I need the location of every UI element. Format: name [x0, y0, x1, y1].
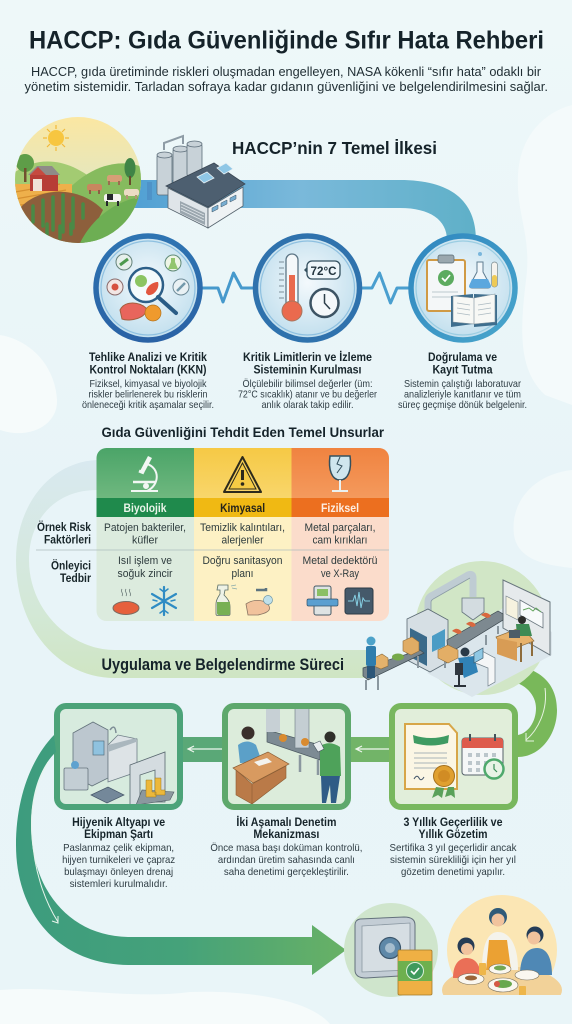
text: three year validity: 3 Yıllık Geçerlilik ve — [404, 817, 502, 829]
connector: card 2 to card 1 — [183, 737, 222, 762]
text: verification: Kayıt Tutma — [432, 364, 493, 376]
text: hazard analysis: Kontrol Noktaları (KKN) — [90, 364, 207, 376]
icon: safe with packaged food — [344, 903, 438, 997]
worker with helmet — [366, 636, 376, 678]
connector: heartbeat 1 — [200, 273, 256, 302]
icon: cows — [87, 175, 139, 206]
icon: warning triangle — [224, 457, 261, 492]
icon: x-ray monitor — [345, 588, 373, 614]
table cells: Metal parçaları, — [304, 522, 376, 534]
icon: spray bottle — [216, 585, 237, 616]
row labels: Faktörleri — [44, 534, 91, 546]
text: critical limits: anlık olarak takip edilir. — [262, 399, 354, 411]
text: two-stage audit: İki Aşamalı Denetim — [236, 816, 336, 829]
text: hygiene infrastructure: hijyen turnikeleri ve çapraz — [62, 854, 175, 866]
table cells: alerjenler — [222, 534, 264, 546]
icon: clipboard, flask and book — [411, 236, 515, 340]
icon: barn — [28, 166, 60, 191]
text: hazard analysis: riskler belirlenerek bu risklerin — [88, 388, 208, 400]
text: hygiene infrastructure: Paslanmaz çelik ekipman, — [63, 842, 174, 854]
table cells: Metal dedektörü — [302, 555, 378, 567]
column headers: Fiziksel — [321, 503, 359, 515]
heading: implementation process: Uygulama ve Belgelendirme Süreci — [102, 655, 344, 674]
icon: thermometer and clock: 72°C — [310, 264, 337, 278]
blue process band — [125, 180, 476, 240]
seated auditor — [238, 726, 262, 763]
icon: microscope — [131, 457, 158, 491]
icon: farm landscape — [14, 117, 145, 245]
text: two-stage audit: saha denetimi gerçekleştirilir. — [224, 866, 349, 878]
text: hygiene infrastructure: Hijyenik Altyapı ve — [72, 817, 165, 829]
heading: seven principles: HACCP’nin 7 Temel İlkesi — [232, 138, 437, 158]
table cells: Doğru sanitasyon — [202, 555, 282, 567]
table cells: Temizlik kalıntıları, — [200, 522, 285, 534]
table cells — [104, 522, 378, 580]
text: critical limits: Kritik Limitlerin ve İzleme — [243, 351, 372, 364]
intro text: HACCP, gıda üretiminde riskleri oluşmadan engelleyen, NASA kökenli “sıfır hata” odaklı bir — [31, 64, 542, 79]
column headers: Kimyasal — [220, 503, 265, 515]
office worker and desk — [496, 616, 534, 662]
column headers: Biyolojik — [124, 503, 167, 515]
panel: hazard analysis — [82, 236, 214, 411]
heading: threats: Gıda Güvenliğini Tehdit Eden Temel Unsurlar — [102, 424, 385, 440]
text: two-stage audit: Mekanizması — [253, 829, 319, 841]
text: three year validity: Sertifika 3 yıl geçerlidir ancak — [390, 842, 517, 854]
icon: cooked meat — [113, 589, 139, 614]
icon: metal detector — [307, 586, 338, 615]
text: two-stage audit — [210, 816, 362, 878]
text: verification — [398, 352, 527, 411]
icon: broken glass — [329, 456, 351, 491]
table cells: küfler — [132, 534, 158, 546]
text: two-stage audit: Önce masa başı doküman kontrolü, — [210, 842, 362, 854]
mother — [482, 908, 518, 970]
green ribbon around table — [16, 460, 375, 678]
table cells: ve X-Ray — [321, 568, 359, 580]
upper conveyor — [447, 611, 503, 654]
intro text — [24, 64, 548, 94]
text: hazard analysis — [82, 352, 214, 411]
table cells: Patojen bakteriler, — [104, 522, 186, 534]
connector: heartbeat 2 — [359, 273, 411, 303]
row labels: Önleyici — [51, 560, 91, 572]
table cells: soğuk zincir — [118, 568, 173, 580]
text: hazard analysis: Tehlike Analizi ve Kritik — [89, 352, 208, 364]
table plates — [458, 964, 539, 992]
column headers — [124, 503, 359, 515]
text: three year validity: sistemin sürekliliği için her yıl — [390, 854, 516, 866]
intro text: yönetim sistemidir. Tarladan sofraya kadar gıdanın güvenliğini ve belgelendirilmesini sağlar. — [24, 79, 548, 94]
text: verification: analizleriyle kanıtlanır ve tüm — [404, 388, 521, 400]
illustration: factory production line — [363, 561, 552, 697]
icon: thermometer and clock — [256, 236, 360, 340]
text: verification: süreç geçmişe dönük belgelenir. — [398, 399, 527, 411]
illustration: auditor and desk — [233, 708, 341, 804]
icon: washing hands — [246, 588, 272, 615]
icon: family eating together — [442, 895, 562, 995]
card: three year validity — [392, 706, 515, 807]
machine — [462, 598, 484, 620]
table cells: Isıl işlem ve — [118, 555, 172, 567]
icon: factory — [147, 136, 245, 228]
title: HACCP: Gıda Güvenliğinde Sıfır Hata Rehberi — [29, 26, 544, 54]
right green arrow to certificate card — [498, 664, 557, 757]
connector: card 3 to card 2 — [351, 737, 389, 762]
big green arrow — [16, 735, 346, 975]
row labels — [37, 521, 92, 585]
text: hygiene infrastructure: bulaşmayı önleyen drenaj — [64, 866, 173, 878]
table cells: cam kırıkları — [312, 534, 368, 546]
daughter — [453, 938, 481, 978]
text: three year validity — [390, 817, 517, 878]
text: verification: Doğrulama ve — [428, 352, 497, 364]
panel: critical limits — [238, 236, 377, 411]
table cells: planı — [232, 568, 254, 580]
text: hazard analysis: önleneceği kritik aşamalar seçilir. — [82, 399, 214, 411]
text: three year validity: gözetim denetimi yapılır. — [401, 866, 505, 878]
text: hygiene infrastructure: Ekipman Şartı — [84, 829, 153, 841]
row labels: Tedbir — [60, 573, 91, 585]
icon: snowflake — [152, 587, 176, 615]
text: critical limits: 72°C sıcaklık) atanır ve bu değerler — [238, 388, 377, 400]
office wall — [503, 580, 550, 655]
text: critical limits: Sisteminin Kurulması — [254, 364, 362, 376]
text: two-stage audit: ardından üretim sahasında canlı — [218, 854, 355, 866]
standing inspector — [313, 732, 341, 803]
father — [520, 926, 552, 975]
lower conveyor — [363, 650, 424, 680]
icon: magnifier with hazards — [96, 236, 200, 340]
text: hygiene infrastructure — [62, 817, 175, 890]
card: hygiene infrastructure — [57, 706, 180, 807]
text: verification: Sistemin çalıştığı laboratuvar — [404, 378, 521, 390]
panel: verification — [398, 236, 527, 411]
icon: certificate — [405, 724, 457, 798]
text: critical limits: Ölçülebilir bilimsel değerler (üm: — [242, 378, 372, 390]
text: hazard analysis: Fiziksel, kimyasal ve biyolojik — [90, 378, 207, 390]
card: two-stage audit — [225, 706, 348, 807]
desk worker — [454, 648, 495, 686]
pipe — [428, 574, 473, 617]
text: critical limits — [238, 351, 377, 411]
icon: calendar — [462, 734, 504, 778]
panel: threats table — [36, 448, 390, 621]
text: three year validity: Yıllık Gözetim — [418, 829, 488, 841]
text: hygiene infrastructure: sistemleri kurulmalıdır. — [70, 878, 168, 890]
row labels: Örnek Risk — [37, 521, 92, 534]
illustration: hygienic equipment — [64, 722, 174, 805]
